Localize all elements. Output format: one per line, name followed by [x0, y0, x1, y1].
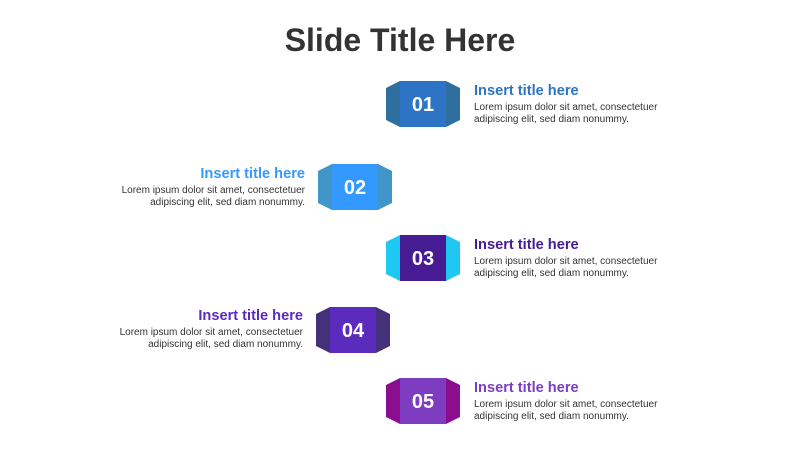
text block 03: Lorem ipsum dolor sit amet, consectetuer: [474, 256, 657, 267]
text block 01: Insert title here: [474, 83, 579, 99]
text block 05: [474, 380, 658, 422]
text block 05: Insert title here: [474, 380, 579, 396]
marker 03: [386, 235, 460, 281]
text block 03: [474, 237, 658, 279]
marker 03: 03: [412, 248, 434, 270]
text block 04: Lorem ipsum dolor sit amet, consectetuer: [120, 327, 303, 338]
marker 01: 01: [412, 94, 434, 116]
marker 05: [386, 378, 460, 424]
text block 01: Lorem ipsum dolor sit amet, consectetuer: [474, 102, 657, 113]
text block 02: adipiscing elit, sed diam nonummy.: [150, 197, 305, 208]
text block 01: [474, 83, 658, 125]
text block 02: Insert title here: [200, 166, 305, 182]
marker 05: 05: [412, 391, 434, 413]
text block 03: Insert title here: [474, 237, 579, 253]
marker 02: 02: [344, 177, 366, 199]
text block 02: [122, 166, 305, 208]
text block 04: adipiscing elit, sed diam nonummy.: [148, 339, 303, 350]
text block 01: adipiscing elit, sed diam nonummy.: [474, 114, 629, 125]
marker 02: [318, 164, 392, 210]
marker 01: [386, 81, 460, 127]
text block 02: Lorem ipsum dolor sit amet, consectetuer: [122, 185, 305, 196]
text block 05: Lorem ipsum dolor sit amet, consectetuer: [474, 399, 657, 410]
text block 04: Insert title here: [198, 308, 303, 324]
marker 04: 04: [342, 320, 365, 342]
marker 04: [316, 307, 390, 353]
text block 05: adipiscing elit, sed diam nonummy.: [474, 411, 629, 422]
text block 03: adipiscing elit, sed diam nonummy.: [474, 268, 629, 279]
title: Slide Title Here: [285, 22, 515, 58]
text block 04: [120, 308, 303, 350]
